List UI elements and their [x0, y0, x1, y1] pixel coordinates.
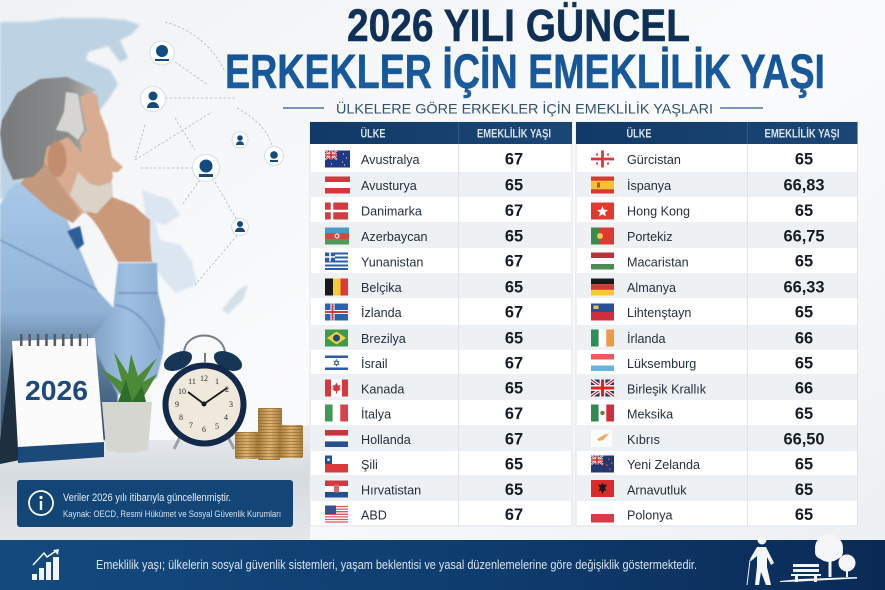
row: Lihtenştayn: [591, 304, 813, 322]
row: Portekiz: [577, 222, 857, 248]
hand on chin: [85, 197, 152, 262]
flag: New Zealand: [591, 456, 614, 472]
icon: park bench and trees: [780, 534, 857, 582]
icon: person node 5: [192, 154, 220, 182]
row: Almanya: Almanya: [627, 281, 676, 295]
footer band: [0, 534, 885, 590]
row: Gürcistan: Gürcistan: [627, 153, 681, 167]
flag: Hungary: [591, 252, 614, 270]
clock numerals: 7: [189, 421, 193, 430]
row: Hırvatistan: [311, 475, 571, 501]
table header right: EMEKLİLİK YAŞI: [764, 128, 840, 140]
row: Şili: [325, 456, 523, 474]
table header left: EMEKLİLİK YAŞI: [477, 128, 551, 140]
table header right: [576, 122, 858, 144]
row: Hırvatistan: 65: [505, 481, 523, 499]
row: Birleşik Krallık: Birleşik Krallık: [627, 382, 707, 396]
table header left: ÜLKE: [360, 128, 386, 140]
row: Danimarka: 67: [505, 202, 523, 220]
row: Portekiz: Portekiz: [627, 230, 672, 244]
row: Hong Kong: [591, 202, 813, 220]
flag: Cyprus: [591, 430, 612, 447]
icon: info: [29, 491, 53, 515]
flag: Greece: [325, 252, 348, 270]
flag: Azerbaijan: [325, 228, 349, 244]
row: Arnavutluk: Arnavutluk: [627, 484, 687, 498]
flag: Germany: [591, 278, 614, 296]
row: İspanya: İspanya: [627, 179, 671, 193]
row: Almanya: 66,33: [783, 278, 825, 296]
row: İzlanda: 67: [505, 304, 523, 322]
beard: [70, 172, 113, 212]
row: Kanada: Kanada: [361, 382, 404, 396]
icon: person node 6: [232, 218, 248, 236]
row: Yeni Zelanda: Yeni Zelanda: [627, 458, 700, 472]
row: Hollanda: [311, 425, 571, 451]
flag: Spain: [591, 176, 614, 194]
row: Yeni Zelanda: 65: [795, 456, 813, 474]
row: Lüksemburg: 65: [795, 354, 813, 372]
row: Danimarka: [325, 202, 523, 220]
row: Almanya: [577, 273, 857, 298]
row: Brezilya: 65: [505, 330, 523, 348]
row: Hollanda: 67: [505, 430, 523, 448]
man in profile: [0, 77, 165, 440]
row: Avustralya: Avustralya: [361, 153, 420, 167]
row: Kanada: [311, 374, 571, 400]
icon: growth chart: [32, 549, 59, 580]
row: İsrail: İsrail: [361, 357, 388, 371]
clock numerals: 11: [188, 377, 196, 386]
row: İrlanda: İrlanda: [627, 332, 666, 346]
ear: [48, 141, 66, 177]
row: Polonya: Polonya: [627, 508, 673, 522]
table header left: [310, 122, 572, 144]
row: Avusturya: Avusturya: [361, 179, 417, 193]
row: Macaristan: 65: [795, 252, 813, 270]
icon: elderly man walking: [747, 536, 774, 585]
row: İtalya: İtalya: [361, 408, 391, 422]
flag: Canada: [325, 380, 348, 396]
row: İzlanda: [325, 304, 523, 322]
row: İzlanda: İzlanda: [361, 306, 402, 320]
flag: Liechtenstein: [591, 304, 614, 320]
clock numerals: 2: [225, 385, 229, 394]
flag: Belgium: [325, 278, 348, 296]
row: Arnavutluk: [577, 475, 857, 501]
row: Hırvatistan: Hırvatistan: [361, 484, 421, 498]
flag: Hong Kong: [591, 202, 614, 220]
clock numerals: 9: [175, 400, 179, 409]
info box: [17, 480, 293, 527]
flag: Chile: [325, 456, 348, 472]
row: İspanya: [577, 172, 857, 197]
row: İrlanda: 66: [795, 330, 813, 348]
flag: Mexico: [591, 404, 614, 422]
row: Belçika: Belçika: [361, 281, 402, 295]
clock numerals: 3: [229, 400, 233, 409]
potted plant: [100, 352, 157, 453]
clock numerals: 12: [200, 374, 208, 383]
table: right: [576, 122, 858, 526]
row: Arnavutluk: 65: [795, 481, 813, 499]
row: Birleşik Krallık: 66: [795, 380, 813, 398]
row: Macaristan: [591, 252, 813, 270]
flag: Denmark: [325, 202, 348, 220]
row: Gürcistan: [591, 150, 813, 168]
row: Avustralya: 67: [505, 150, 523, 168]
row: Yunanistan: Yunanistan: [361, 256, 423, 270]
source text: Kaynak: OECD, Resmi Hükümet ve Sosyal Güvenlik Kurumları: [63, 509, 281, 520]
flag: Israel: [325, 354, 348, 370]
clock numerals: 5: [215, 422, 219, 431]
row: Macaristan: Macaristan: [627, 256, 689, 270]
flag: Luxembourg: [591, 354, 614, 371]
row: Yunanistan: [325, 252, 523, 270]
clock numerals: 4: [224, 413, 228, 422]
row: Polonya: [591, 506, 813, 524]
row: Polonya: 65: [795, 506, 813, 524]
title: [225, 0, 825, 99]
row: Kıbrıs: [577, 425, 857, 451]
row: Hong Kong: Hong Kong: [627, 204, 690, 218]
row: Meksika: 65: [795, 405, 813, 423]
table: left: [310, 122, 572, 526]
flag: Australia: [325, 150, 350, 168]
row: Avusturya: [311, 172, 571, 197]
icon: person node 1: [150, 41, 174, 65]
row: Avustralya: [325, 150, 523, 168]
info text: Veriler 2026 yılı itibarıyla güncellenmiştir.: [63, 492, 231, 504]
clock numerals: [175, 374, 233, 434]
row: Meksika: Meksika: [627, 408, 673, 422]
row: Azerbaycan: Azerbaycan: [361, 230, 428, 244]
coin stacks: [235, 408, 303, 460]
footer note: Emeklilik yaşı; ülkelerin sosyal güvenlik sistemleri, yaşam beklentisi ve yasal düzenlemelerine göre değişiklik göstermektedir.: [96, 558, 697, 572]
row: Birleşik Krallık: [577, 374, 857, 400]
desk calendar 2026: [0, 338, 104, 464]
row: Şili: Şili: [361, 458, 378, 472]
row: ABD: [325, 506, 523, 524]
subtitle: ÜLKELERE GÖRE ERKEKLER İÇİN EMEKLİLİK YAŞLARI: [336, 100, 713, 116]
clock numerals: 8: [179, 413, 183, 422]
row: Hollanda: Hollanda: [361, 433, 411, 447]
row: ABD: 67: [505, 506, 523, 524]
row: Kıbrıs: 66,50: [783, 430, 825, 448]
row: İspanya: 66,83: [783, 176, 825, 194]
flag: Albania: [591, 480, 614, 497]
row: Meksika: [591, 404, 813, 423]
row: Kıbrıs: Kıbrıs: [627, 433, 660, 447]
desk surface: [0, 425, 310, 541]
row: Belçika: [311, 273, 571, 298]
network nodes: [135, 22, 284, 285]
row: Lüksemburg: Lüksemburg: [627, 357, 696, 371]
icon: person node 3: [232, 132, 248, 148]
row: Brezilya: Brezilya: [361, 332, 406, 346]
row: Lihtenştayn: Lihtenştayn: [627, 306, 691, 320]
flag: Croatia: [325, 480, 348, 498]
row: Hong Kong: 65: [795, 202, 813, 220]
flag: Austria: [325, 176, 350, 194]
flag: Poland: [591, 506, 614, 522]
row: Lüksemburg: [591, 354, 813, 372]
row: Şili: 65: [505, 456, 523, 474]
flag: USA: [325, 506, 348, 522]
row: İtalya: 67: [505, 405, 523, 423]
neck and face: [20, 86, 123, 223]
flag: Netherlands: [325, 430, 348, 447]
world map backdrop: [0, 18, 248, 314]
row: Brezilya: [311, 325, 571, 350]
row: İsrail: [325, 354, 523, 372]
row: Danimarka: Danimarka: [361, 204, 422, 218]
flag: Portugal: [591, 228, 614, 244]
row: ABD: ABD: [361, 508, 387, 522]
flag: United Kingdom: [591, 380, 614, 397]
title: 2026 YILI GÜNCEL: [347, 0, 690, 51]
calendar year: 2026: [25, 375, 88, 406]
flag: Brazil: [325, 330, 348, 346]
flag: Italy: [325, 404, 348, 422]
row: Avusturya: 65: [505, 176, 523, 194]
clock numerals: 6: [202, 425, 206, 434]
table header right: ÜLKE: [626, 128, 652, 140]
flag: Iceland: [325, 304, 348, 320]
flag: Georgia: [591, 150, 614, 168]
clock numerals: 10: [178, 387, 186, 396]
alarm clock: [161, 336, 246, 449]
row: Belçika: 65: [505, 278, 523, 296]
row: Lihtenştayn: 65: [795, 304, 813, 322]
row: Azerbaycan: 65: [505, 228, 523, 246]
row: İtalya: [325, 404, 523, 423]
icon: person node 4: [264, 146, 284, 166]
row: Yunanistan: 67: [505, 252, 523, 270]
row: Yeni Zelanda: [591, 456, 813, 474]
row: Azerbaycan: [311, 222, 571, 248]
icon: person node 2: [140, 86, 166, 112]
row: Kanada: 65: [505, 380, 523, 398]
flag: Ireland: [591, 330, 614, 346]
sleeve: [90, 263, 165, 395]
row: İsrail: 67: [505, 354, 523, 372]
collar: [67, 226, 84, 250]
row: Gürcistan: 65: [795, 150, 813, 168]
row: Portekiz: 66,75: [783, 228, 825, 246]
row: İrlanda: [577, 325, 857, 350]
hair: [0, 77, 97, 180]
clock numerals: 1: [215, 377, 219, 386]
shirt: [0, 183, 118, 440]
